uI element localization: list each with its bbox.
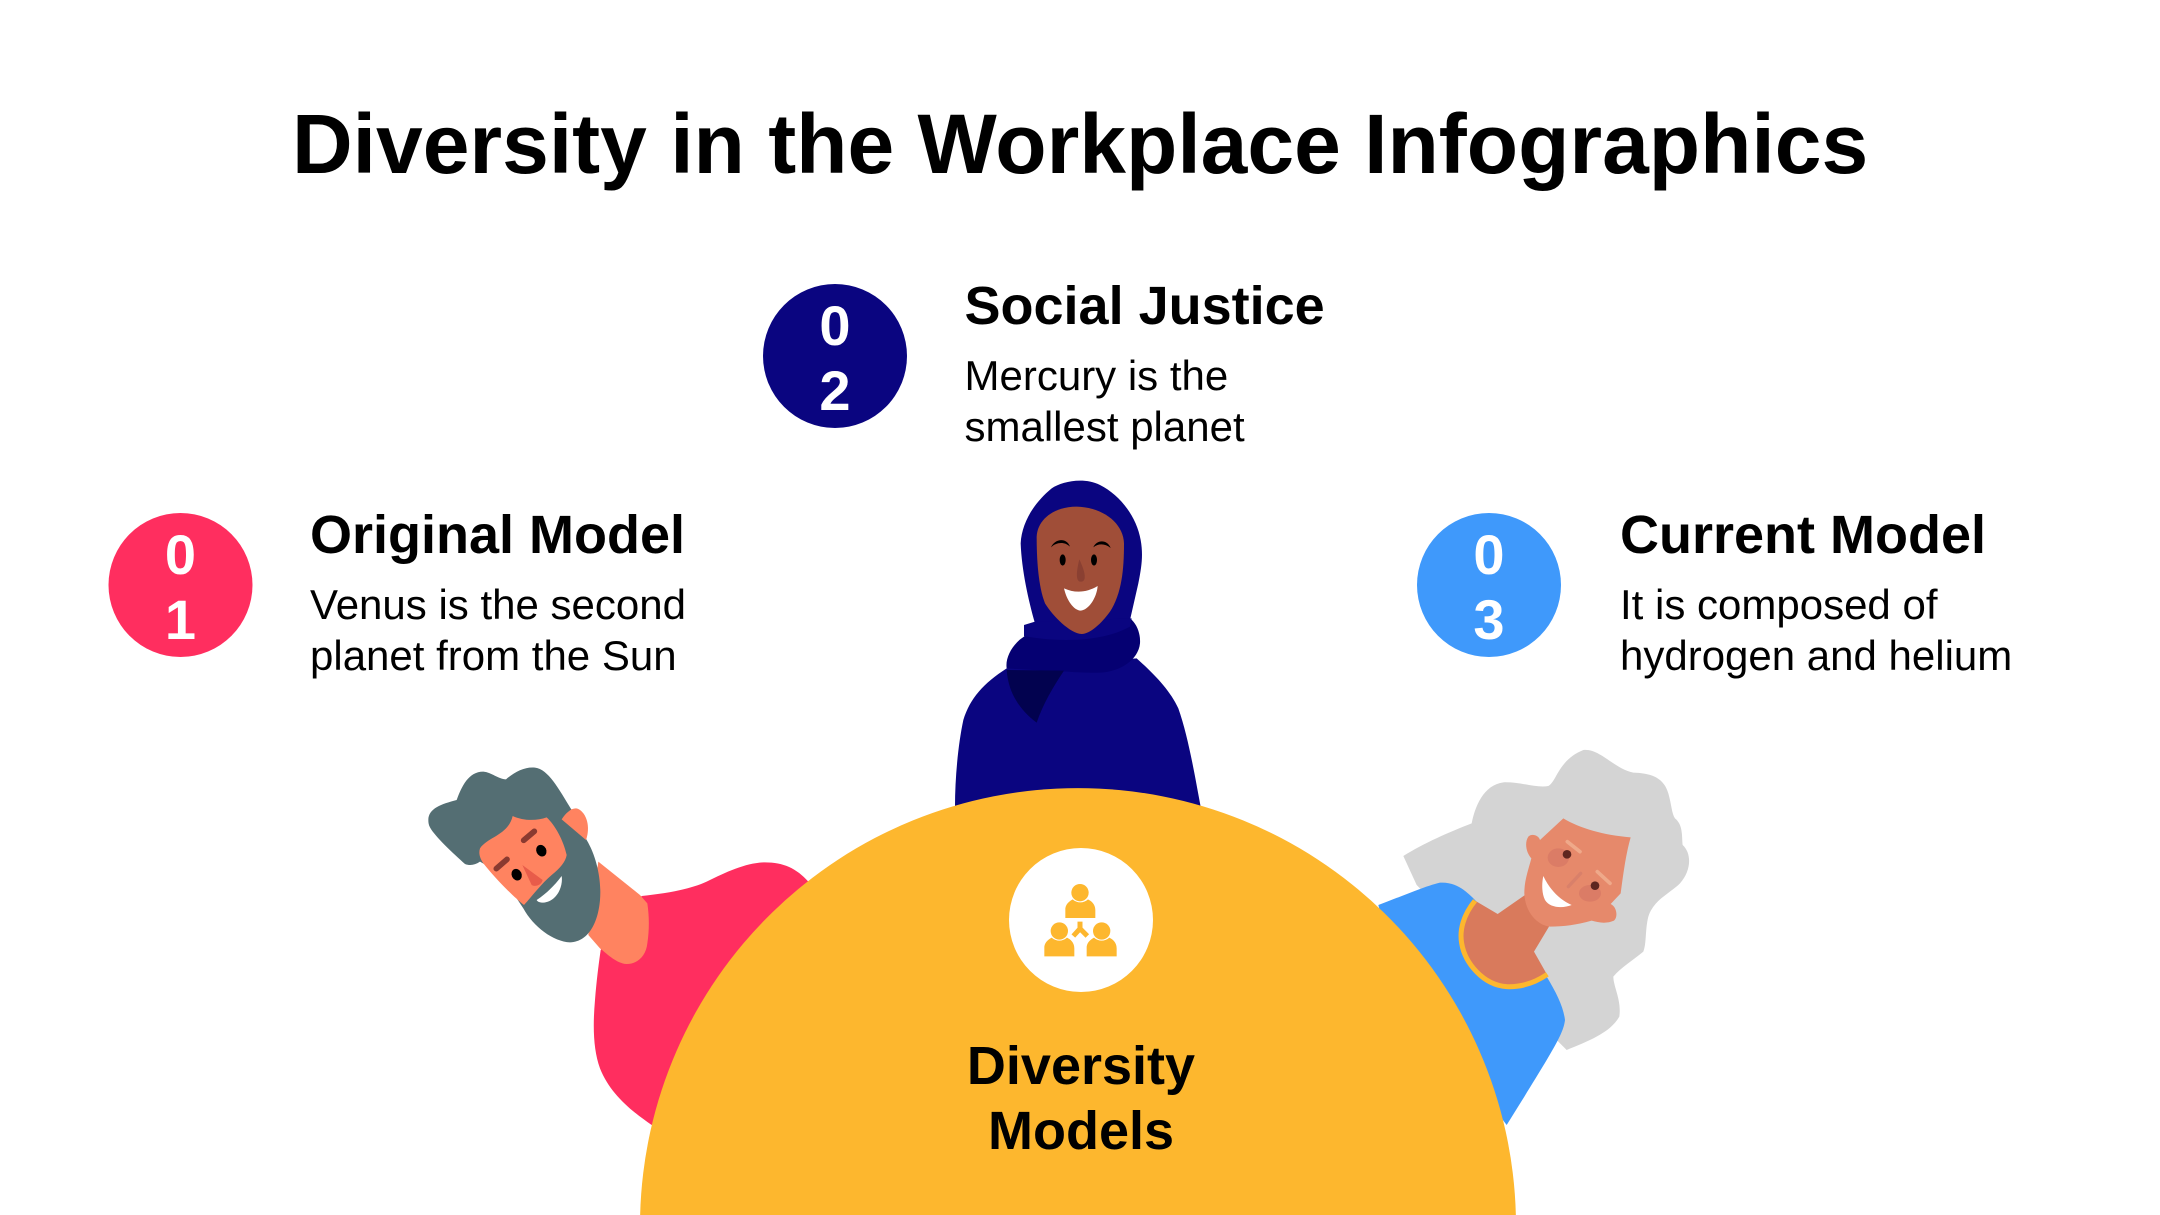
badge 01: 0: [165, 523, 196, 586]
panel: item 02 social justice: [763, 276, 1325, 450]
heading: current model: Current Model: [1620, 505, 1986, 565]
panel: item 03 current model: [1417, 505, 2012, 679]
text: social justice description: Mercury is the: [964, 352, 1228, 399]
illustration: grey-haired woman in blue shirt: [1378, 750, 1689, 1125]
icon: team hierarchy in white circle: [1009, 848, 1153, 992]
badge 03: [1417, 513, 1561, 657]
badge 03: 0: [1473, 523, 1505, 586]
badge 01: [108, 513, 252, 657]
central label: diversity models: [967, 1036, 1195, 1161]
text: social justice description: [964, 352, 1245, 450]
badge 02: 0: [819, 294, 851, 357]
text: original model description: Venus is the second: [310, 581, 686, 628]
illustration: woman in navy hijab: [955, 481, 1201, 820]
central label: diversity models: Models: [988, 1101, 1174, 1161]
illustration: bearded man in pink shirt: [428, 768, 808, 1125]
text: current model description: It is composed of: [1620, 581, 1938, 628]
central label: diversity models: Diversity: [967, 1036, 1195, 1096]
central semicircle panel: [640, 788, 1516, 1215]
badge 02: 2: [819, 359, 851, 422]
text: current model description: [1620, 581, 2012, 679]
heading: original model: Original Model: [310, 505, 685, 565]
text: social justice description: smallest planet: [964, 403, 1245, 450]
heading: social justice: Social Justice: [964, 276, 1325, 336]
text: original model description: planet from the Sun: [310, 632, 677, 679]
title: Diversity in the Workplace Infographics: [292, 97, 1868, 191]
badge 02: [763, 284, 907, 428]
text: original model description: [310, 581, 686, 679]
badge 03: 3: [1473, 588, 1505, 651]
panel: item 01 original model: [108, 505, 686, 679]
badge 01: 1: [165, 588, 196, 651]
text: current model description: hydrogen and helium: [1620, 632, 2012, 679]
